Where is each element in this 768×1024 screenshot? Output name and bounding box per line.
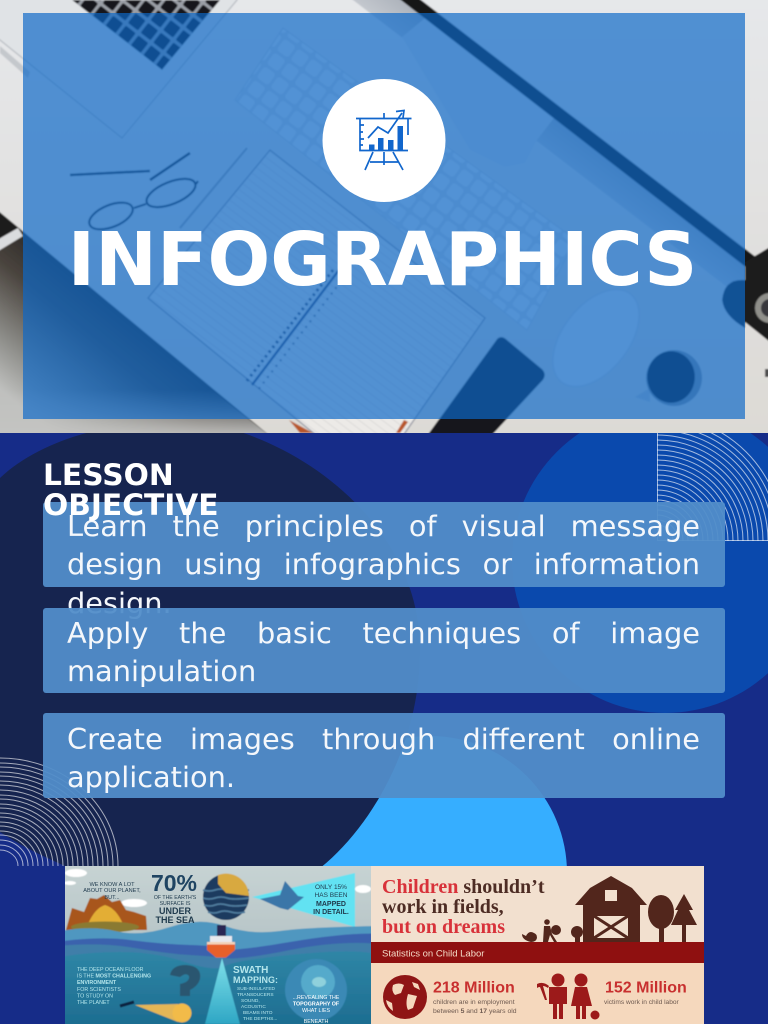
light blue circle [322, 798, 567, 866]
ocean labels [83, 875, 348, 923]
infographic thumbnail: ocean mapping: TOPOGRAPHY OF [293, 1002, 340, 1008]
stat: 218 million: children are in employment [433, 999, 515, 1006]
infographic thumbnail: ocean mapping: THE DEPTHS... [243, 1016, 277, 1022]
objective text 1: Learn the principles of visual message design using infographics or information design. [67, 509, 700, 620]
infographic thumbnail: ocean mapping: ...REVEALING THE [293, 995, 340, 1001]
red band [371, 942, 704, 963]
island [66, 895, 147, 932]
infographic thumbnail: ocean mapping: SOUND, [241, 998, 260, 1004]
heading text [382, 879, 544, 933]
concentric rings: top right [657, 433, 768, 541]
ship [207, 925, 235, 958]
mini seabed [260, 881, 304, 910]
ocean labels: ONLY 15% [315, 884, 347, 891]
infographic thumbnail: ocean mapping: SWATH [233, 965, 268, 976]
objective box 3 [43, 713, 725, 798]
diver beam [135, 1004, 178, 1022]
infographic thumbnail: ocean mapping: BEAMS INTO [243, 1010, 273, 1016]
infographic thumbnail: ocean mapping: FOR SCIENTISTS [77, 987, 121, 993]
icon: presentation chart in white circle [322, 79, 446, 202]
bright blue circle [512, 407, 768, 713]
stat: 152 million [537, 974, 687, 1020]
ocean labels: IN DETAIL. [313, 909, 349, 916]
ocean labels: OF THE EARTH'S [154, 895, 197, 901]
objective box 2 [43, 608, 725, 693]
ocean labels: THE SEA [155, 915, 195, 925]
stat: 152 million: 152 Million [605, 980, 687, 996]
objective box 1 [43, 502, 725, 587]
infographic thumbnail: ocean mapping: MAPPING: [233, 975, 278, 985]
ocean labels: SURFACE IS [160, 901, 191, 907]
stat: 218 million: between 5 and 17 years old [433, 1008, 517, 1015]
infographic thumbnail: ocean mapping: THE DEEP OCEAN FLOOR [77, 967, 144, 973]
clouds [64, 869, 371, 907]
seabed map [285, 959, 347, 1021]
infographic thumbnail: ocean mapping: TRANSDUCERS [237, 992, 274, 998]
heading: lesson objective: LESSON OBJECTIVE [43, 458, 219, 523]
globe [203, 874, 249, 920]
heading text: work in fields, [382, 896, 504, 918]
stat: 218 million [383, 975, 517, 1019]
infographic thumbnail: child labor [371, 866, 704, 1024]
question mark [170, 965, 200, 996]
objective text 2: Apply the basic techniques of image manipulation [67, 616, 700, 688]
ocean labels: 70% [151, 870, 197, 896]
infographic thumbnail: ocean mapping: SUB-INSULATED [237, 986, 276, 992]
dark navy circle [0, 433, 417, 866]
ocean labels: HAS BEEN [315, 892, 348, 899]
slide 1: desk photo with blue overlay [0, 0, 768, 433]
cyan beam [252, 873, 355, 927]
stat: 152 million: victims work in child labor [604, 999, 680, 1006]
objective text 3: Create images through different online application. [67, 722, 700, 794]
heading text: but on dreams [382, 916, 505, 938]
title: INFOGRAPHICS [68, 217, 697, 303]
slide 2: background circles and rings [0, 433, 768, 866]
infographic thumbnail: ocean mapping: ENVIRONMENT [77, 980, 117, 986]
infographic thumbnail: ocean mapping: IS THE MOST CHALLENGING [77, 974, 151, 980]
waves [65, 921, 371, 950]
infographic thumbnail: ocean mapping [65, 866, 371, 1024]
infographic thumbnail: ocean mapping: THE PLANET [77, 1000, 110, 1006]
ocean labels: WE KNOW A LOT [89, 882, 135, 888]
stat: 218 million: 218 Million [433, 980, 515, 996]
ocean labels: MAPPED [316, 901, 346, 908]
infographic thumbnail: ocean mapping: TO STUDY ON [77, 994, 113, 1000]
ocean labels: ABOUT OUR PLANET, [83, 888, 141, 894]
infographic thumbnail: ocean mapping: WHAT LIES [302, 1008, 330, 1014]
barn and trees [522, 876, 697, 942]
concentric rings: bottom left [0, 758, 118, 866]
sonar beam [205, 958, 240, 1024]
blue overlay panel [23, 13, 745, 419]
photo [0, 0, 768, 453]
infographic thumbnail: ocean mapping: ACOUSTIC [241, 1004, 266, 1010]
ocean labels: UNDER [159, 906, 191, 916]
ocean labels: BUT... [104, 895, 120, 901]
heading text: Children shouldn’t [382, 876, 545, 898]
band caption: Statistics on Child Labor [382, 948, 484, 960]
